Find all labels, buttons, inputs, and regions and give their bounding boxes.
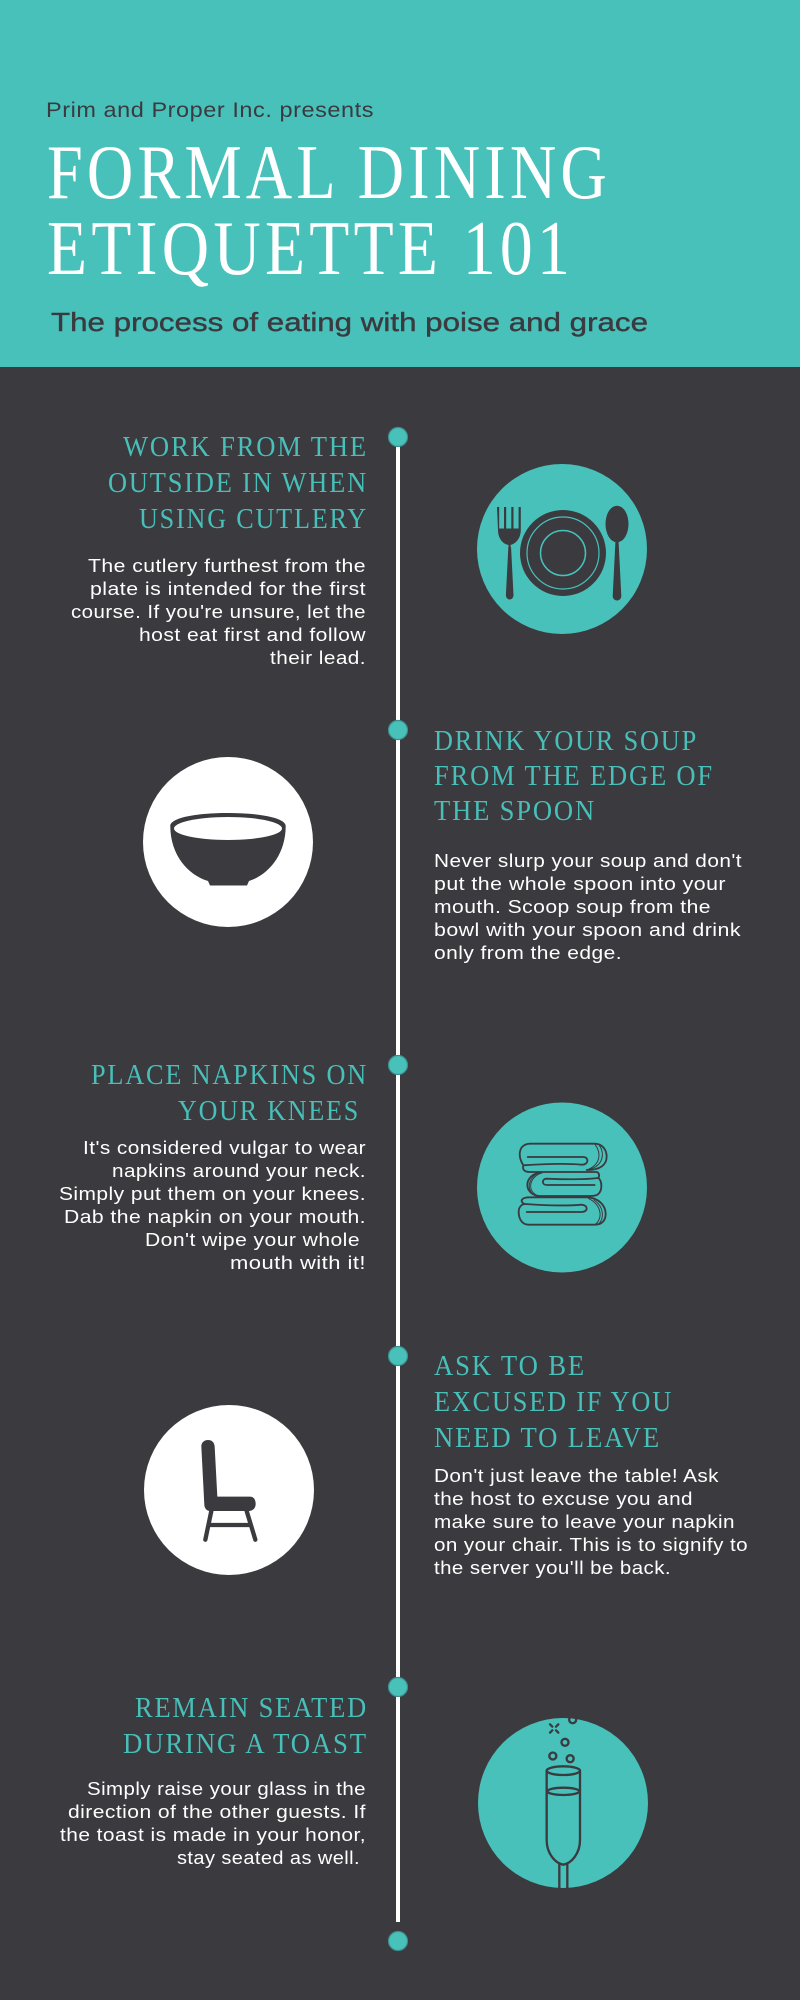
- text: excuse: Don't just leave the table! Ask: [434, 1465, 719, 1486]
- text: excuse: the host to excuse you and: [434, 1488, 693, 1509]
- text: napkins: Simply put them on your knees.: [59, 1183, 366, 1204]
- text: soup: mouth. Scoop soup from the: [434, 896, 711, 917]
- text: cutlery: [71, 555, 366, 668]
- title: FORMAL DINING: [47, 129, 611, 215]
- heading: toast: DURING A TOAST: [123, 1728, 368, 1760]
- text: napkins: mouth with it!: [230, 1252, 366, 1273]
- heading: cutlery: [108, 431, 368, 535]
- text: soup: bowl with your spoon and drink: [434, 919, 741, 940]
- text: excuse: the server you'll be back.: [434, 1557, 671, 1578]
- text: soup: [434, 850, 742, 963]
- text: napkins: [59, 1137, 366, 1273]
- heading: excuse: ASK TO BE: [434, 1350, 586, 1382]
- text: excuse: make sure to leave your napkin: [434, 1511, 735, 1532]
- heading: excuse: EXCUSED IF YOU: [434, 1386, 673, 1418]
- heading: toast: [123, 1692, 368, 1760]
- icon: bowl: [143, 757, 313, 927]
- heading: cutlery: OUTSIDE IN WHEN: [108, 467, 368, 499]
- text: soup: put the whole spoon into your: [434, 873, 726, 894]
- panel: napkin tip: [59, 1059, 647, 1273]
- heading: napkins: YOUR KNEES: [178, 1095, 360, 1127]
- text: excuse: on your chair. This is to signify to: [434, 1534, 748, 1555]
- text: napkins: Dab the napkin on your mouth.: [64, 1206, 366, 1227]
- heading: excuse: [434, 1350, 673, 1454]
- text: napkins: Don't wipe your whole: [145, 1229, 360, 1250]
- presenter line: Prim and Proper Inc. presents: [46, 99, 374, 122]
- text: toast: Simply raise your glass in the: [87, 1778, 366, 1799]
- text: toast: [60, 1778, 367, 1868]
- icon: plate with fork and spoon: [477, 464, 647, 634]
- text: napkins: napkins around your neck.: [112, 1160, 366, 1181]
- header panel: [0, 0, 800, 367]
- text: soup: only from the edge.: [434, 942, 622, 963]
- panel: toast tip: [60, 1692, 648, 1889]
- heading: napkins: PLACE NAPKINS ON: [91, 1059, 368, 1091]
- heading: cutlery: WORK FROM THE: [123, 431, 368, 463]
- title: ETIQUETTE 101: [47, 205, 574, 291]
- text: cutlery: plate is intended for the first: [90, 578, 366, 599]
- panel: excuse tip: [144, 1350, 748, 1578]
- heading: soup: THE SPOON: [434, 795, 596, 827]
- heading: napkins: [91, 1059, 368, 1127]
- text: toast: stay seated as well.: [177, 1847, 360, 1868]
- icon: chair: [144, 1405, 314, 1575]
- text: toast: the toast is made in your honor,: [60, 1824, 366, 1845]
- text: cutlery: host eat first and follow: [139, 624, 366, 645]
- timeline: [388, 428, 408, 1950]
- icon: folded napkins: [477, 1102, 647, 1272]
- text: excuse: [434, 1465, 748, 1578]
- heading: toast: REMAIN SEATED: [135, 1692, 368, 1724]
- text: soup: Never slurp your soup and don't: [434, 850, 742, 871]
- title: [47, 129, 611, 291]
- heading: excuse: NEED TO LEAVE: [434, 1422, 661, 1454]
- heading: soup: FROM THE EDGE OF: [434, 760, 714, 792]
- text: cutlery: The cutlery furthest from the: [88, 555, 366, 576]
- heading: cutlery: USING CUTLERY: [139, 503, 368, 535]
- icon: champagne flute: [478, 1716, 648, 1889]
- heading: soup: DRINK YOUR SOUP: [434, 725, 698, 757]
- panel: cutlery tip: [71, 431, 647, 668]
- panel: soup tip: [143, 725, 742, 963]
- text: cutlery: course. If you're unsure, let the: [71, 601, 366, 622]
- text: napkins: It's considered vulgar to wear: [83, 1137, 366, 1158]
- heading: soup: [434, 725, 714, 827]
- text: toast: direction of the other guests. If: [68, 1801, 367, 1822]
- subtitle: The process of eating with poise and grace: [51, 307, 648, 337]
- text: cutlery: their lead.: [270, 647, 366, 668]
